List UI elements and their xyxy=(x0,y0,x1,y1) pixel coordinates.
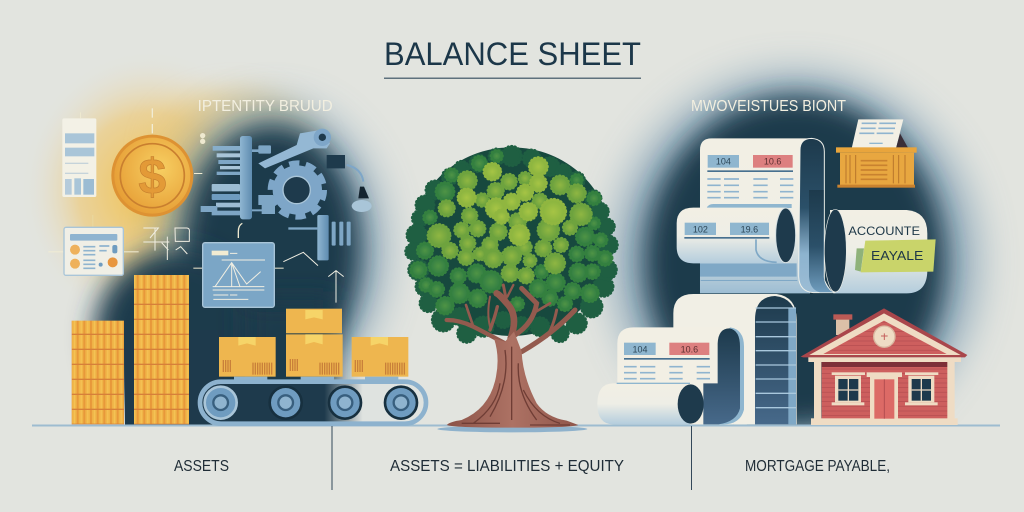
coin stack tall xyxy=(134,275,189,424)
scroll: lower back sheet xyxy=(673,294,797,424)
scroll: middle roll: 19.6 xyxy=(741,225,758,235)
scroll: top ledger xyxy=(700,138,810,293)
icon: gear and arm xyxy=(252,129,372,216)
label: equation: ASSETS = LIABILITIES + EQUITY xyxy=(390,458,624,475)
tree shadow xyxy=(437,426,587,432)
title: BALANCE SHEET xyxy=(384,36,641,72)
tag: payable: EAYALE xyxy=(871,249,923,263)
right panel: liabilities illustration xyxy=(597,98,967,425)
icon: dollar coin xyxy=(111,108,202,217)
tag: payable xyxy=(861,239,936,272)
scroll: middle roll xyxy=(677,208,796,263)
right dark glow xyxy=(613,74,977,450)
label: mortgage: MORTGAGE PAYABLE, xyxy=(745,458,890,475)
scroll: lower ledger: 10.6 xyxy=(681,345,698,355)
baseline xyxy=(32,424,1000,426)
icon: dashboard card xyxy=(48,215,139,275)
icon: ballot box xyxy=(836,119,917,188)
scroll: ribbon xyxy=(799,138,846,293)
left dark glow xyxy=(20,50,977,450)
dividers xyxy=(332,426,692,490)
canopy xyxy=(406,147,617,342)
trunk and branches xyxy=(447,285,578,428)
heading: right: MWOVEISTUES BIONT xyxy=(691,98,847,115)
icon: trend arrow xyxy=(283,252,344,303)
heading: left: IPTENTITY BRUUD xyxy=(198,98,333,115)
scroll: lower ledger xyxy=(617,327,755,424)
icon: chart monitor xyxy=(193,243,284,307)
scroll: middle roll: 102 xyxy=(693,225,708,235)
icon: scribble marks xyxy=(143,228,189,260)
scroll: bottom roll xyxy=(597,383,704,424)
label: assets: ASSETS xyxy=(174,458,229,475)
icon: machine stack xyxy=(200,133,271,219)
conveyor belt xyxy=(200,377,426,424)
scroll: right roll: ACCOUNTE xyxy=(848,224,920,238)
left panel: assets illustration xyxy=(48,98,426,424)
icon: lower machine xyxy=(238,215,351,260)
scroll: right roll xyxy=(830,210,927,293)
icon: dollar coin: $ xyxy=(138,149,166,205)
scroll: lower ledger: 104 xyxy=(632,345,647,355)
coin stack short xyxy=(72,321,124,424)
scroll: top ledger: 104 xyxy=(716,157,731,167)
icon: house xyxy=(801,308,967,425)
tree xyxy=(406,147,617,432)
cardboard boxes xyxy=(219,309,408,377)
scroll: top ledger: 10.6 xyxy=(764,157,781,167)
icon: document xyxy=(62,112,96,197)
